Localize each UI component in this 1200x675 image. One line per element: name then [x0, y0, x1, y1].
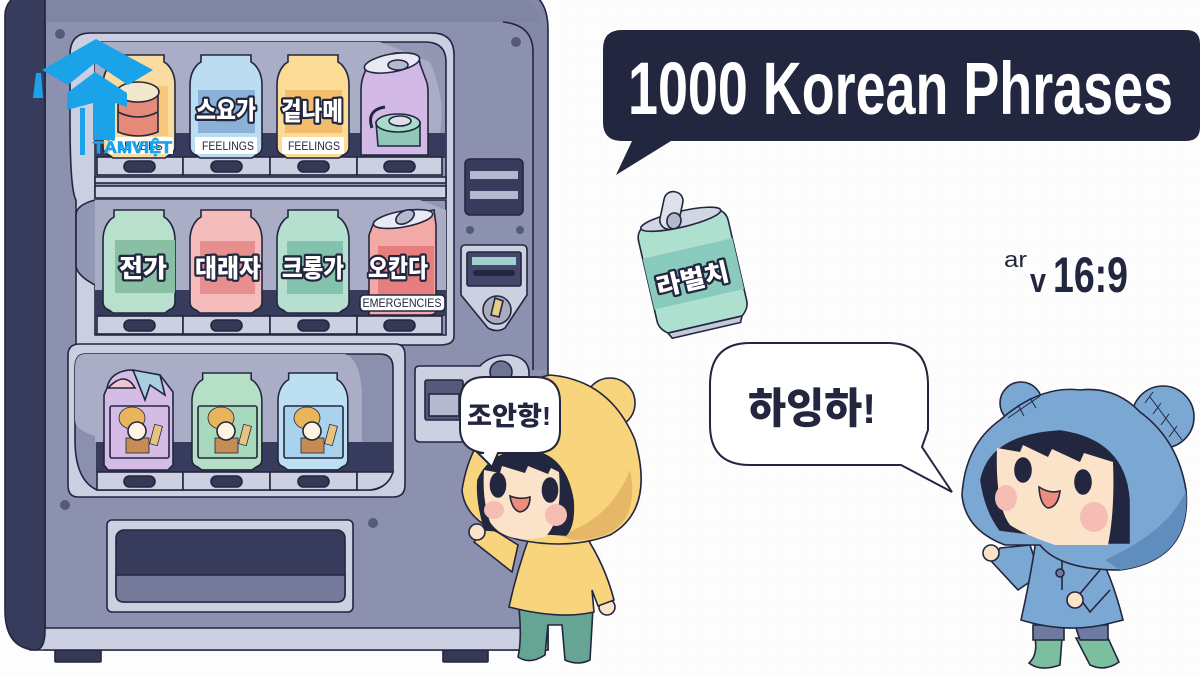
bubble [460, 377, 560, 467]
can: blue 스요가: 스요가 [196, 97, 256, 125]
boots [1029, 638, 1119, 668]
can: purple with mascot [104, 370, 173, 470]
change panel [415, 355, 529, 442]
body [1021, 540, 1123, 628]
can: pink 대래자: 대래자 [195, 255, 261, 283]
face [997, 445, 1113, 545]
arm raised [992, 545, 1040, 590]
hair [478, 450, 573, 535]
can: blue with mascot [278, 373, 348, 470]
retrieval door [107, 520, 353, 612]
lower window [68, 344, 405, 497]
aspect ratio note: 16:9 [1053, 247, 1128, 303]
aspect ratio note: v [1030, 262, 1046, 300]
can: pink 오칸다 emergencies: 오칸다 [368, 255, 428, 283]
arm raised [474, 526, 518, 572]
body [509, 535, 614, 615]
bubble: 조안항! [467, 401, 551, 431]
ears [1000, 382, 1042, 424]
can: pink 오칸다 emergencies: EMERGENCIES [362, 296, 442, 310]
pants [1033, 625, 1108, 640]
can: pink 대래자 [190, 210, 262, 313]
hand right [599, 599, 615, 615]
can: yellow 겉나메: 겉나메 [281, 98, 343, 126]
legs [518, 608, 593, 663]
shelf rails [95, 177, 446, 183]
can: yellow 겉나메 [277, 55, 349, 158]
can: orange opened: LEVELS [117, 139, 163, 153]
speech bubble: 하잉하! [748, 385, 876, 432]
row 2 buttons [97, 316, 442, 334]
vent [465, 159, 523, 215]
can: yellow 겉나메: FEELINGS [288, 139, 340, 153]
can: green with mascot [192, 373, 262, 470]
hands [983, 545, 999, 561]
can: blue 스요가: FEELINGS [202, 139, 254, 153]
can label: 라벌치 [654, 258, 732, 302]
aspect ratio note [1004, 247, 1128, 303]
title banner [603, 30, 1200, 175]
machine body [45, 0, 548, 650]
can: green 크롱가: 크롱가 [282, 255, 344, 283]
logo: graduation cap [33, 39, 173, 157]
hand [469, 524, 485, 540]
yellow character [460, 375, 641, 663]
screws [55, 29, 524, 528]
aspect ratio note: ar [1004, 247, 1027, 272]
floating can [629, 178, 751, 341]
can: blue 스요가 [190, 55, 262, 158]
vending machine [5, 0, 548, 662]
can: pink 오칸다 emergencies [360, 206, 445, 315]
can: green 전가: 전가 [119, 255, 167, 283]
hood [962, 389, 1186, 570]
face [484, 466, 560, 539]
coin panel [461, 245, 527, 330]
dark side strip [5, 0, 45, 650]
logo text: TÂMVIỆT [93, 138, 173, 157]
can: orange opened [103, 55, 175, 158]
upper window [70, 33, 454, 345]
can: green 전가 [103, 210, 175, 313]
can: green 크롱가 [277, 210, 349, 313]
machine feet [55, 650, 488, 662]
can: purple opened [361, 49, 428, 155]
ear [585, 378, 635, 428]
hood [462, 375, 641, 544]
speech bubble [710, 343, 952, 492]
hair [981, 431, 1129, 543]
row 1 buttons [97, 157, 442, 175]
blue character [962, 382, 1194, 668]
machine base [30, 628, 548, 650]
